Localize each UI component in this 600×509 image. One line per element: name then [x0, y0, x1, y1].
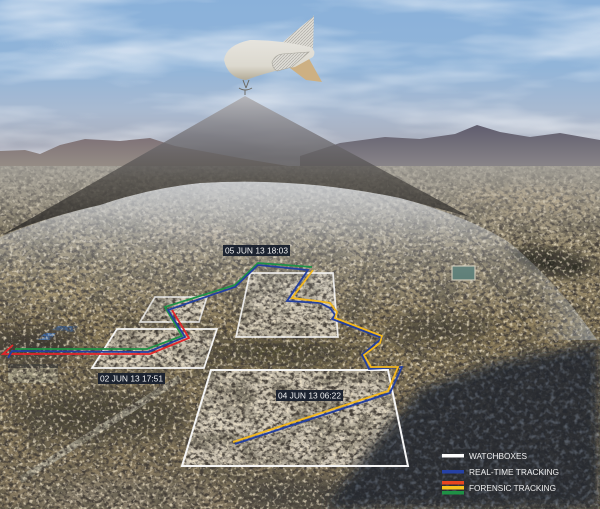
- sky: [0, 0, 600, 168]
- building lower left: [8, 364, 58, 383]
- green forensic track: [15, 263, 312, 349]
- label: 02 JUN 13 17:51: 02 JUN 13 17:51: [100, 374, 163, 384]
- aerostat blimp: [224, 15, 322, 95]
- legend: watchboxes: WATCHBOXES: [469, 451, 527, 461]
- legend: real-time tracking: REAL-TIME TRACKING: [469, 467, 559, 477]
- balloon body: [224, 40, 314, 80]
- legend: [442, 451, 559, 494]
- label: 05 JUN 13 18:03: 05 JUN 13 18:03: [225, 246, 288, 256]
- watchbox: lower left: [92, 329, 217, 368]
- red forensic track: [3, 310, 189, 354]
- watchbox: centre: [236, 273, 338, 337]
- watchbox: top small: [140, 297, 207, 322]
- surveillance cone: [2, 96, 470, 235]
- watchboxes: [92, 273, 408, 466]
- green-front tower: [452, 266, 475, 280]
- tracks: [3, 263, 402, 444]
- label: 04 JUN 13 06:22: 04 JUN 13 06:22: [278, 390, 341, 400]
- mountains: [0, 125, 600, 172]
- city ground: [0, 166, 600, 509]
- tree patch: [505, 247, 595, 278]
- coverage dome: [0, 182, 597, 340]
- payload: [239, 80, 252, 95]
- legend: forensic tracking: FORENSIC TRACKING: [469, 483, 556, 493]
- tail fin: [290, 55, 322, 82]
- side fin: [272, 52, 309, 71]
- top fin: [283, 15, 314, 52]
- yellow forensic track: [233, 270, 398, 442]
- street lines: [240, 215, 530, 350]
- road lower left: [20, 378, 180, 480]
- hill in town: [140, 226, 250, 248]
- blue roofs: [36, 326, 78, 340]
- shadow on lower right of city: [300, 340, 600, 509]
- blue real-time track: [8, 265, 402, 444]
- watchbox highlight fills: [92, 273, 408, 466]
- watchbox: large bottom: [182, 370, 408, 466]
- noise texture: [0, 166, 600, 509]
